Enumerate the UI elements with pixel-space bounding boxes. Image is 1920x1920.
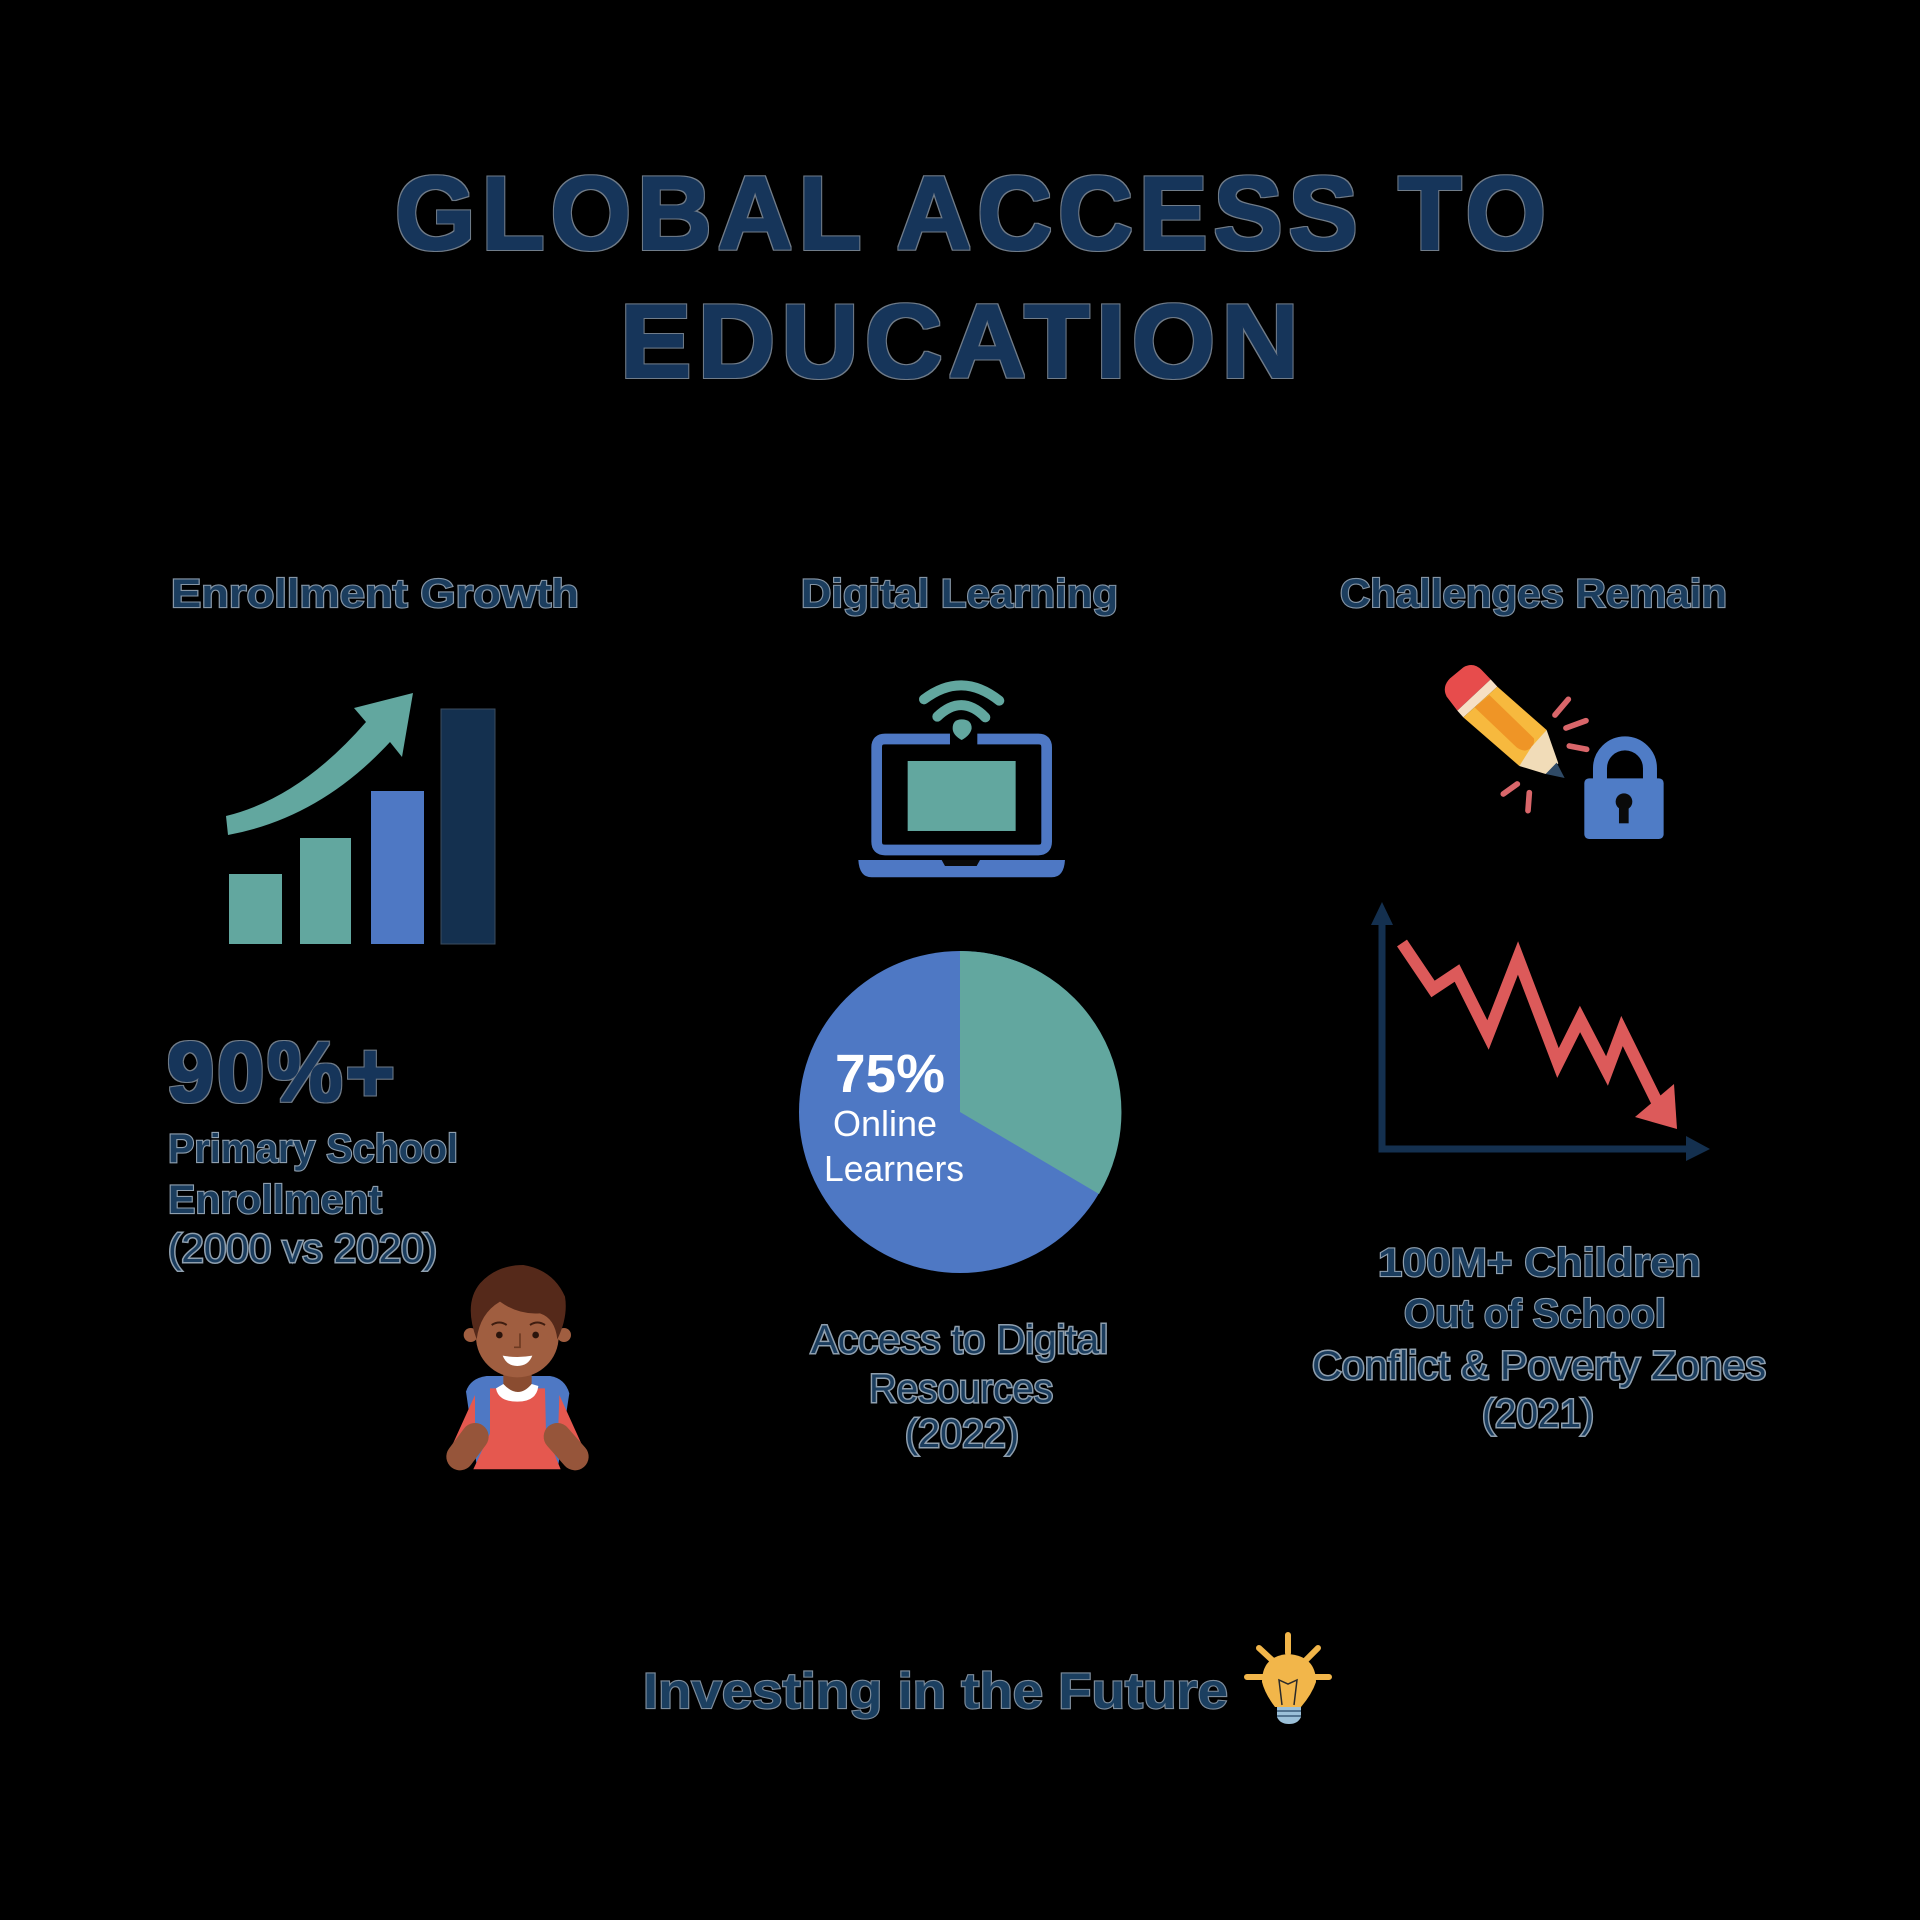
caption: access to digital resources: Resources bbox=[869, 1367, 1053, 1411]
title bbox=[395, 156, 1552, 400]
caption: access to digital resources: Access to Digital bbox=[811, 1318, 1108, 1362]
footer: investing in the future: Investing in the Future bbox=[643, 1663, 1228, 1719]
stat: 100M+ children out of school bbox=[1312, 1241, 1766, 1436]
caption: access to digital resources: (2022) bbox=[905, 1412, 1019, 1456]
stat: 90%+ primary school enrollment bbox=[167, 1025, 458, 1271]
title: GLOBAL ACCESS TO bbox=[395, 156, 1552, 272]
chart: declining line with axes bbox=[1371, 902, 1710, 1161]
stat: 100M+ children out of school: Out of School bbox=[1404, 1292, 1666, 1336]
heading: challenges remain: Challenges Remain bbox=[1340, 572, 1727, 616]
bar chart with rising arrow bbox=[226, 693, 495, 944]
pie chart: 75% online learners: Online bbox=[833, 1103, 937, 1144]
pie chart: 75% online learners bbox=[799, 951, 1121, 1273]
heading: enrollment growth: Enrollment Growth bbox=[171, 572, 579, 616]
stat: 90%+ primary school enrollment: (2000 vs 2020) bbox=[168, 1227, 437, 1271]
stat: 90%+ primary school enrollment: 90%+ bbox=[167, 1025, 398, 1119]
icon: laptop with wifi bbox=[858, 685, 1065, 877]
heading: digital learning: Digital Learning bbox=[801, 572, 1118, 616]
pie chart: 75% online learners: Learners bbox=[824, 1148, 964, 1189]
icon: light bulb bbox=[1247, 1635, 1329, 1724]
stat: 100M+ children out of school: 100M+ Children bbox=[1378, 1241, 1701, 1285]
stat: 100M+ children out of school: (2021) bbox=[1482, 1392, 1594, 1436]
caption: access to digital resources bbox=[811, 1318, 1108, 1456]
stat: 100M+ children out of school: Conflict & Poverty Zones bbox=[1312, 1344, 1766, 1388]
stat: 90%+ primary school enrollment: Enrollment bbox=[168, 1178, 382, 1222]
pie chart: 75% online learners: 75% bbox=[835, 1044, 945, 1104]
icon: student with backpack bbox=[449, 1265, 585, 1469]
title: EDUCATION bbox=[620, 284, 1305, 400]
stat: 90%+ primary school enrollment: Primary School bbox=[168, 1127, 458, 1171]
icon: pencil and padlock bbox=[1445, 665, 1664, 839]
